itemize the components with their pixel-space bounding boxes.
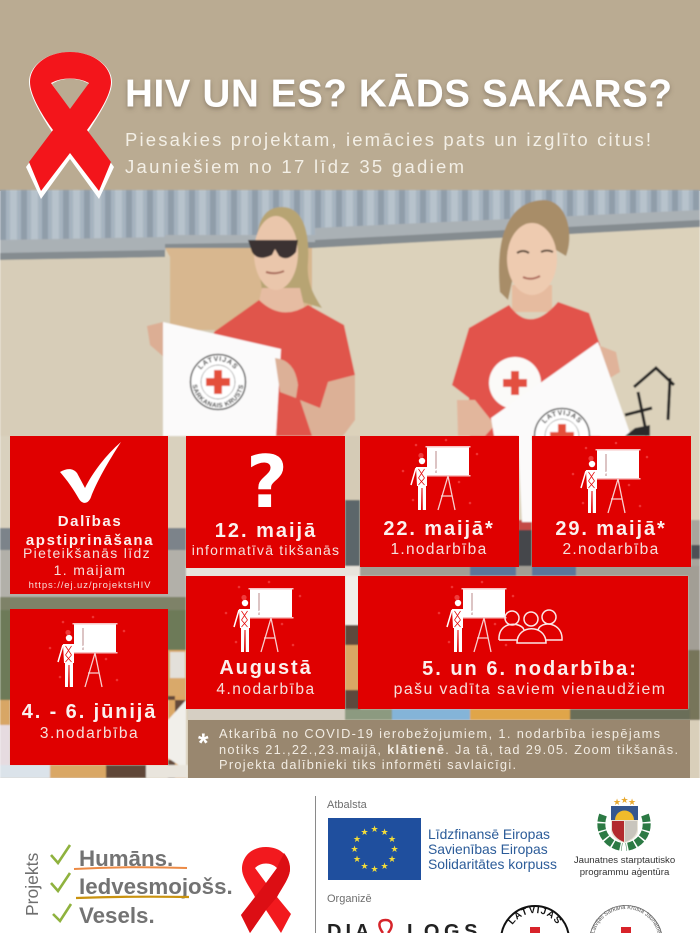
EU text xyxy=(428,826,557,872)
EU text: Līdzfinansē Eiropas xyxy=(428,826,550,842)
note text xyxy=(198,726,678,772)
panel: Dalības apstiprināšana: Dalības xyxy=(58,513,122,530)
icon: EU flag: ★ xyxy=(380,827,389,837)
EU text: Savienības Eiropas xyxy=(428,841,548,857)
icon: Latvian coat of arms xyxy=(601,795,647,847)
subtitle: Piesakies projektam, iemācies pats un izglīto citus! xyxy=(125,129,651,150)
note text: notiks 21.,22.,23.maijā, klātienē. Ja tā, tad 29.05. Zoom tikšanās. xyxy=(219,742,678,757)
panel: 22. maijā: 1.nodarbība xyxy=(390,541,488,558)
panel: Augustā xyxy=(186,576,345,709)
icon: group of people xyxy=(499,610,562,643)
project slogan: Projekts xyxy=(22,853,42,916)
icon: EU flag xyxy=(328,818,421,880)
icon: EU flag: ★ xyxy=(350,844,359,854)
panel: 4.-6. jūnijā: 3.nodarbība xyxy=(40,725,139,742)
project slogan: Vesels. xyxy=(79,903,155,928)
panel: 29. maijā xyxy=(532,436,691,567)
panel: 12. maijā: 12. maijā xyxy=(215,520,317,542)
panel: 5. un 6. nodarbība: pašu vadīta saviem vienaudžiem xyxy=(394,681,666,698)
vertical divider xyxy=(315,796,316,933)
panel: Dalības apstiprināšana xyxy=(10,436,168,594)
agency text xyxy=(574,855,675,878)
right volunteer xyxy=(452,200,674,522)
panel: 22. maijā xyxy=(360,436,519,567)
logo: Dialogs xyxy=(327,920,482,933)
title: HIV UN ES? KĀDS SAKARS? xyxy=(125,72,672,116)
icon: EU flag: ★ xyxy=(370,824,379,834)
label: Organizē: Organizē xyxy=(327,893,372,905)
icon: Latvian coat of arms: ★ xyxy=(613,797,621,807)
panel: Dalības apstiprināšana: https://ej.uz/projektsHIV xyxy=(29,580,151,591)
panel: 4.-6. jūnijā xyxy=(10,609,168,765)
icon: EU flag: ★ xyxy=(388,854,396,864)
project slogan xyxy=(22,845,233,928)
subtitle xyxy=(125,129,651,177)
icon: EU flag: ★ xyxy=(388,834,396,844)
agency text: Jaunatnes starptautisko xyxy=(574,855,675,866)
panel: 12. maijā: informatīvā tikšanās xyxy=(192,542,340,558)
icon: EU flag: ★ xyxy=(390,844,399,854)
icon: presenter xyxy=(438,581,514,652)
icon: presenter xyxy=(572,442,648,513)
agency text: programmu aģentūra xyxy=(580,867,670,878)
icon: EU flag: ★ xyxy=(353,854,361,864)
note text: Atkarībā no COVID-19 ierobežojumiem, 1. nodarbība iespējams xyxy=(219,726,660,741)
panel: Dalības apstiprināšana: apstiprināšana xyxy=(26,532,154,549)
subtitle: Jauniešiem no 17 līdz 35 gadiem xyxy=(125,156,464,177)
icon: presenter xyxy=(49,616,125,687)
panel: 29. maijā: 29. maijā* xyxy=(555,518,667,540)
left volunteer xyxy=(147,207,355,436)
icon: green ticks xyxy=(51,845,71,921)
icon: Latvian coat of arms: ★ xyxy=(620,795,629,805)
icon: EU flag: ★ xyxy=(360,827,369,837)
panel: Dalības apstiprināšana: Pieteikšanās līdz xyxy=(23,545,151,561)
icon: Latvian coat of arms: ★ xyxy=(628,797,636,807)
panel: Augustā: 4.nodarbība xyxy=(216,681,316,698)
note text: Projekta dalībnieki tiks informēti savlaicīgi. xyxy=(219,757,516,772)
header background xyxy=(0,0,700,191)
footer background xyxy=(0,778,700,933)
logo: Latvijas Sarkanais Krusts xyxy=(500,905,570,933)
logo: Latvijas Sarkanais Krusts: LATVIJAS xyxy=(508,907,561,924)
panel: 29. maijā: 2.nodarbība xyxy=(562,541,660,558)
icon: EU flag: ★ xyxy=(360,861,369,871)
icon: presenter xyxy=(225,581,301,652)
note text: * xyxy=(198,728,209,758)
project slogan: Humāns. xyxy=(79,846,173,871)
panel: 4.-6. jūnijā: 4. - 6. jūnijā xyxy=(22,701,157,723)
icon: check mark xyxy=(60,442,121,503)
panel: 5. un 6. nodarbība xyxy=(358,576,688,709)
project slogan: Iedvesmojošs. xyxy=(79,874,233,899)
icon: EU flag: ★ xyxy=(370,864,379,874)
panel: Dalības apstiprināšana: 1. maijam xyxy=(54,562,126,578)
icon: question mark: ? xyxy=(246,440,288,524)
icon: EU flag: ★ xyxy=(380,861,389,871)
EU text: Solidaritātes korpuss xyxy=(428,856,557,872)
label: Atbalsta: Atbalsta xyxy=(327,799,368,811)
note box background xyxy=(188,720,690,778)
panel: 12. maijā xyxy=(186,436,345,568)
panel: 22. maijā: 22. maijā* xyxy=(383,518,495,540)
panel: Augustā: Augustā xyxy=(219,657,313,679)
photo: two volunteers with Red Cross bags xyxy=(0,190,700,780)
panel: 5. un 6. nodarbība: 5. un 6. nodarbība: xyxy=(422,658,638,680)
icon: EU flag: ★ xyxy=(353,834,361,844)
icon: presenter xyxy=(402,439,478,510)
ribbon logo (footer) xyxy=(241,847,291,933)
ribbon logo (header) xyxy=(26,52,114,199)
